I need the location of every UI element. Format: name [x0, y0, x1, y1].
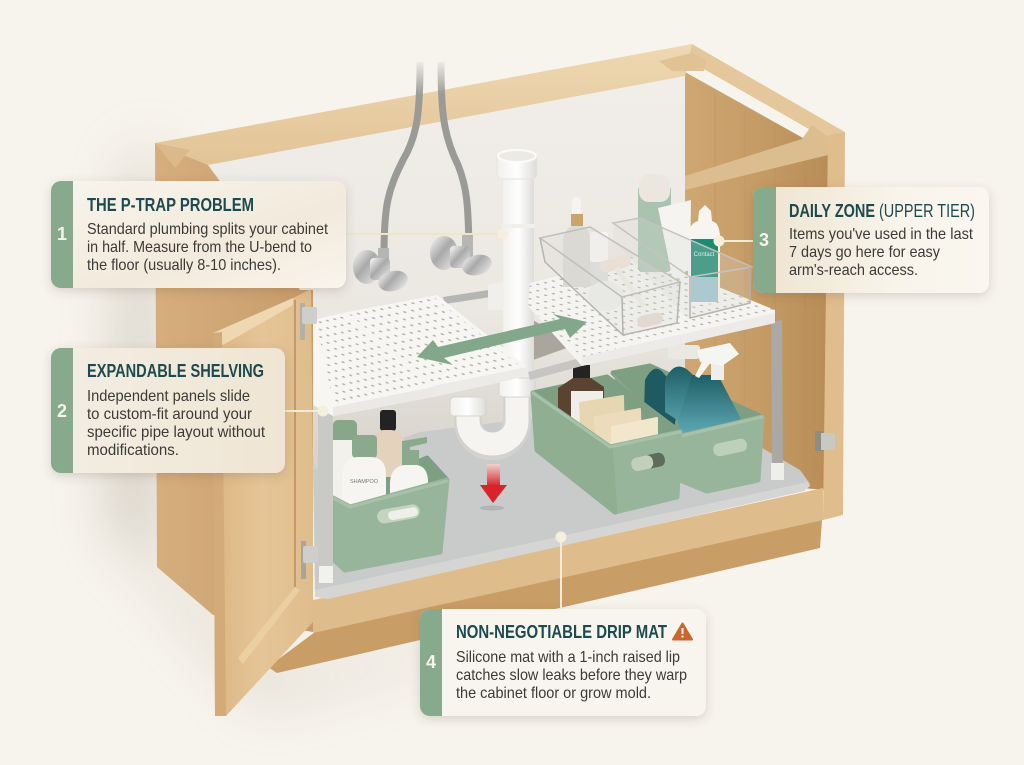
shampoo bottle: SHAMPOO — [350, 479, 379, 485]
rear top rail — [155, 44, 692, 165]
leader lines with anchor dots — [285, 228, 753, 609]
body text — [87, 388, 266, 459]
middle shelf panel — [343, 295, 528, 397]
contact solution bottle — [688, 205, 720, 305]
clear tray: back with toiletries — [613, 174, 752, 318]
upper door hinge — [300, 303, 317, 340]
left valve — [353, 248, 410, 295]
back bottles — [330, 410, 405, 500]
callout 4: non-negotiable drip mat: 4 — [426, 652, 436, 672]
body text: 7 days go here for easy — [789, 244, 940, 261]
red leak arrow — [480, 464, 507, 510]
back wall — [190, 76, 685, 470]
body text: Silicone mat with a 1-inch raised lip — [456, 649, 680, 666]
right valve — [430, 235, 494, 279]
lower bin: shampoo bottles — [330, 410, 447, 570]
heading: (UPPER TIER) — [879, 201, 975, 221]
lower bin: cleaning sprays — [613, 343, 762, 491]
amber bottle — [558, 365, 604, 427]
right front edge — [823, 132, 845, 520]
tray outline — [613, 218, 752, 318]
small jar — [590, 232, 608, 286]
body text — [789, 226, 973, 279]
right top edge — [688, 44, 845, 140]
left outer panel — [155, 143, 313, 632]
right side hinge plate — [815, 431, 835, 451]
jade roller — [598, 254, 664, 329]
green double-headed arrow — [417, 314, 587, 365]
callout 1: the P-trap problem — [51, 181, 346, 288]
soap bars — [580, 396, 657, 449]
rail corner bracket — [659, 53, 706, 71]
callout 2: expandable shelving — [51, 348, 285, 473]
serum dropper bottle — [563, 197, 590, 287]
leader 2 — [285, 406, 328, 416]
body text: modifications. — [87, 442, 179, 459]
rear slide rail — [443, 289, 497, 304]
expandable shelf unit — [313, 255, 784, 583]
callout 3: daily zone — [753, 187, 989, 293]
right shelf panel — [528, 255, 775, 366]
body text: arm's-reach access. — [789, 262, 918, 279]
cabinet base front and toe-kick — [268, 488, 823, 673]
sink cabinet carcass — [155, 44, 845, 632]
drip mat — [313, 400, 810, 599]
body text: in half. Measure from the U-bend to — [87, 239, 312, 256]
tray outline — [540, 227, 680, 335]
callout 3: daily zone: 3 — [759, 230, 769, 250]
heading — [789, 201, 975, 221]
contact solution bottle: Contact — [694, 252, 715, 258]
shelf legs — [318, 410, 333, 582]
body text: Standard plumbing splits your cabinet — [87, 221, 328, 238]
callout 2: expandable shelving: 2 — [57, 401, 67, 421]
white tube — [658, 200, 691, 276]
leader 3 — [714, 236, 753, 246]
body text: the floor (usually 8-10 inches). — [87, 257, 281, 274]
clear tray: front with serum and roller — [540, 197, 680, 335]
body text: specific pipe layout without — [87, 424, 266, 441]
body text: Independent panels slide — [87, 388, 250, 405]
front right rail — [685, 125, 828, 190]
body text — [456, 649, 687, 702]
lower door hinge — [301, 541, 318, 579]
heading: THE P-TRAP PROBLEM — [87, 195, 254, 215]
body text: to custom-fit around your — [87, 406, 253, 423]
callout 4: non-negotiable drip mat — [420, 609, 706, 716]
leader 4 — [556, 532, 566, 609]
body text — [87, 221, 328, 274]
lower bin: soap bars and bottle — [533, 365, 680, 512]
right interior side wall — [685, 72, 828, 490]
pump bottle — [390, 437, 428, 502]
heading: NON-NEGOTIABLE DRIP MAT — [456, 622, 667, 642]
spray bottles — [644, 343, 743, 435]
body text: Items you've used in the last — [789, 226, 973, 243]
pipe top flange — [497, 153, 537, 179]
front slide rail — [528, 358, 582, 380]
tall green bottle — [638, 174, 671, 272]
left shelf panel — [313, 313, 433, 416]
shampoo bottle — [342, 435, 386, 510]
left top wedge — [155, 143, 190, 168]
body text: catches slow leaks before they warp — [456, 667, 687, 684]
heading: EXPANDABLE SHELVING — [87, 361, 264, 381]
supply hoses and shut-off valves — [353, 62, 494, 295]
open cabinet door — [213, 289, 318, 716]
trap slip nuts — [450, 397, 486, 416]
leader 1 — [346, 228, 508, 240]
icon: warning triangle — [673, 624, 692, 640]
body text: the cabinet floor or grow mold. — [456, 685, 651, 702]
drain pipe and P-trap — [450, 150, 575, 446]
callout 1: the P-trap problem: 1 — [57, 224, 67, 244]
heading: DAILY ZONE — [789, 201, 875, 221]
